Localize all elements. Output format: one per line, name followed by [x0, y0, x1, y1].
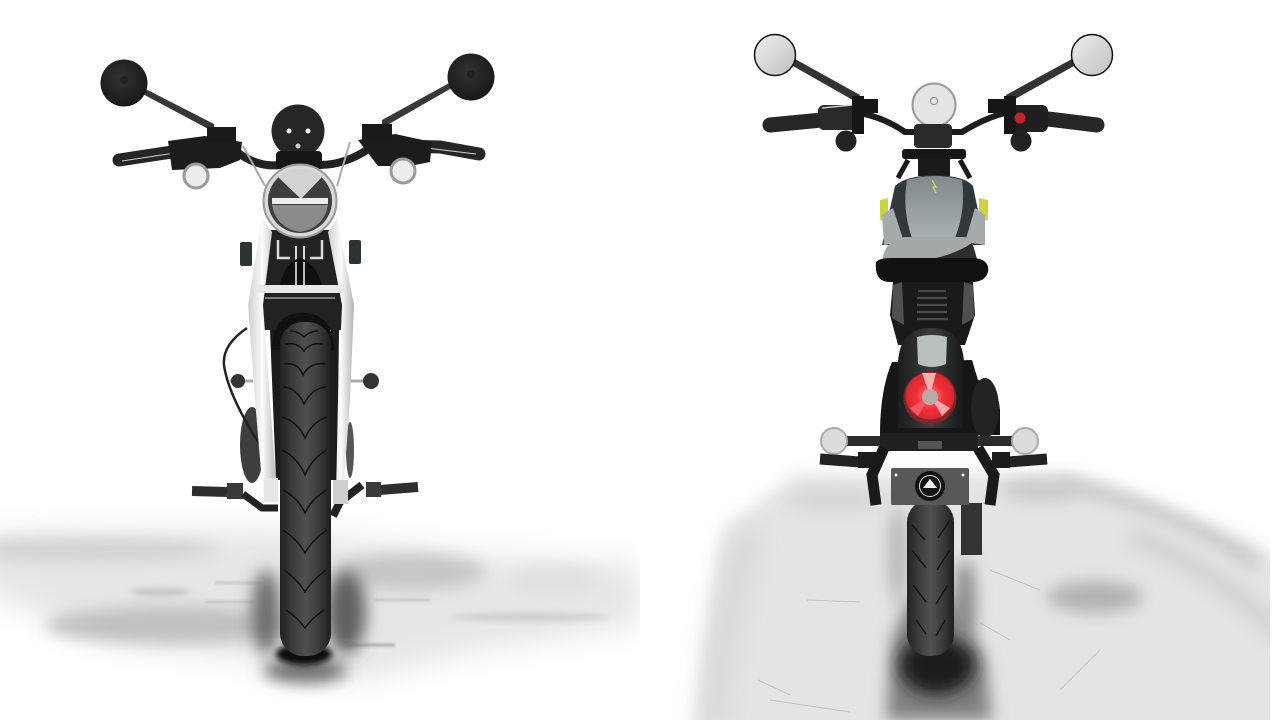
right mirror, black back: [382, 54, 494, 128]
handlebar: [119, 124, 479, 186]
ground smudge: left panel: [0, 530, 640, 683]
instrument cluster: [898, 84, 970, 178]
rear turn signal bar: [821, 428, 1038, 454]
left mirror, black back: [100, 60, 214, 132]
front tyre: [272, 313, 334, 656]
right mirror, glass: [1006, 34, 1112, 103]
frame and forks: [224, 217, 379, 495]
ground wash: right panel: [694, 474, 1280, 720]
rear tyre and flap: [907, 500, 982, 656]
footpegs: [192, 478, 418, 516]
left mirror, glass: [754, 34, 860, 103]
motorcycle: front view: [100, 54, 494, 656]
inner struts beside tyre: [270, 330, 339, 480]
brake hubs and side knobs: [224, 328, 379, 483]
license plate with round logo: [891, 468, 969, 505]
white fork legs: [248, 217, 277, 495]
rear fender: [898, 328, 964, 428]
rear footpegs: [820, 448, 1047, 505]
headlight: [264, 164, 336, 238]
tank: [880, 175, 988, 245]
front turn signals: [184, 159, 415, 188]
motorcycle: rear view: [754, 34, 1112, 656]
tail light: [904, 372, 956, 424]
shock absorber and rear frame: [880, 282, 1000, 438]
seat: [876, 237, 988, 282]
handlebar with grips and switches: [770, 96, 1097, 152]
rear of instrument cluster: [272, 104, 324, 169]
